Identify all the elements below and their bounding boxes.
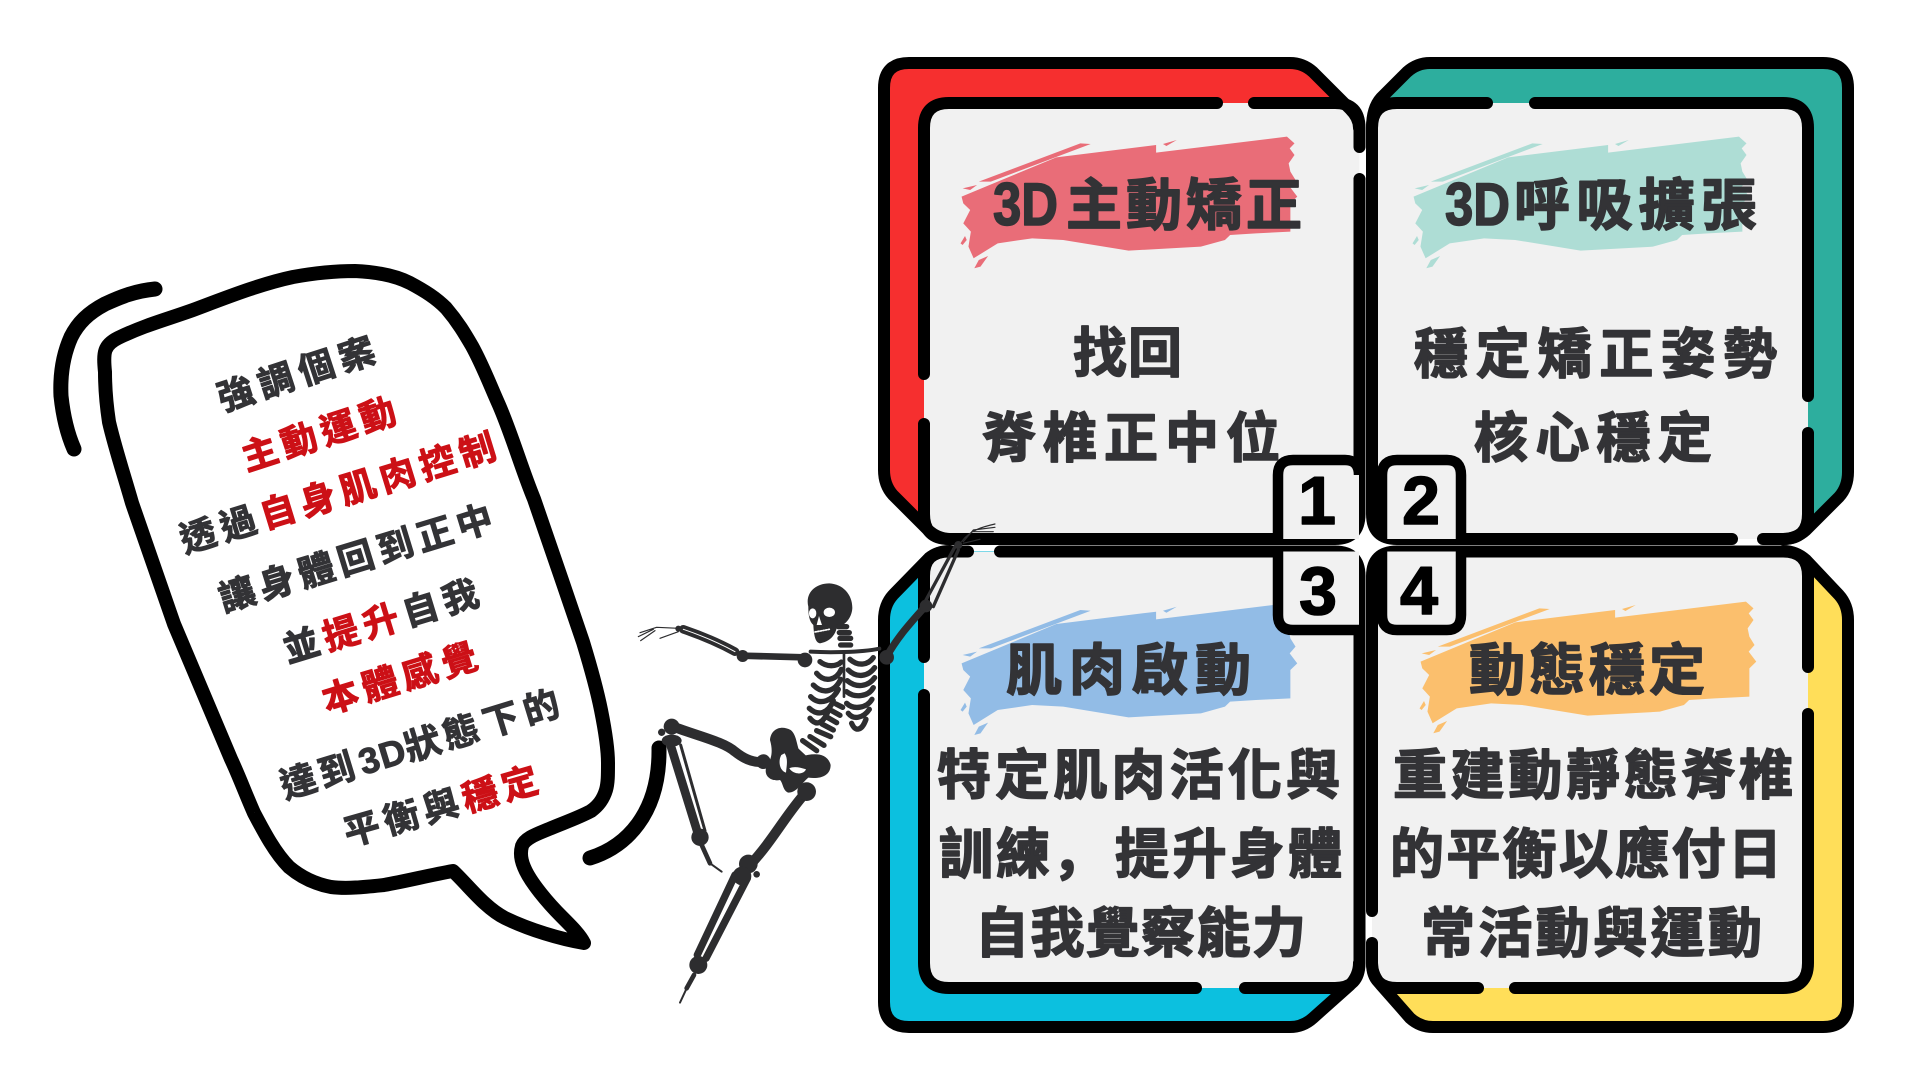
- left leg: [658, 719, 771, 872]
- bubble outline: [104, 271, 608, 943]
- body text: ，: [1052, 810, 1106, 889]
- body text: 穩定矯正姿勢: [1414, 325, 1777, 385]
- badge 1: [1278, 460, 1359, 539]
- heading: 3D: [1445, 171, 1510, 238]
- bubble text: 達到3D狀態下的: [275, 683, 565, 807]
- panel: 3D active correction: [884, 63, 1360, 539]
- brush highlight: [1420, 602, 1756, 733]
- bubble text: 強調個案: [212, 330, 380, 419]
- quote arc left: [61, 289, 155, 449]
- bubble text: 本體感覺: [317, 636, 482, 722]
- badge 4: [1382, 552, 1461, 630]
- body text: [1390, 746, 1793, 964]
- bubble text: 並提升自我: [278, 572, 483, 671]
- neck and spine: [792, 627, 851, 765]
- badge 3: [1278, 552, 1359, 630]
- body text: 自我覺察能力: [975, 904, 1306, 964]
- body text: 特定肌肉活化與: [937, 746, 1340, 806]
- panel: 3D breathing expansion: [1372, 63, 1848, 539]
- heading: 主動矯正: [1066, 174, 1302, 237]
- badge 1: 1: [1298, 463, 1336, 539]
- body text: 找回: [1073, 324, 1182, 384]
- heading: 呼吸擴張: [1514, 174, 1757, 237]
- body text: 的平衡以應付日: [1390, 825, 1782, 885]
- body text: 脊椎正中位: [982, 409, 1280, 469]
- body text: [1414, 325, 1777, 469]
- right leg: [680, 782, 816, 1003]
- brush highlight: [1413, 137, 1749, 268]
- body text: 重建動靜態脊椎: [1393, 746, 1793, 806]
- brush highlight: [961, 603, 1297, 735]
- heading: 肌肉啟動: [1006, 639, 1251, 702]
- left arm: [638, 626, 812, 667]
- brush highlight: [961, 137, 1297, 268]
- body text: [937, 746, 1342, 964]
- body text: 訓練: [939, 825, 1050, 885]
- badge 2: 2: [1402, 463, 1440, 539]
- bubble text: 透過自身肌肉控制: [175, 426, 501, 561]
- body text: 常活動與運動: [1421, 904, 1762, 964]
- badge 3: 3: [1299, 553, 1337, 629]
- body text: [982, 324, 1280, 469]
- panel: muscle activation: [884, 551, 1360, 1027]
- skull: [808, 583, 852, 643]
- body text: 提升身體: [1115, 825, 1342, 885]
- rib cage: [809, 649, 879, 729]
- badge 4: 4: [1400, 553, 1438, 629]
- badge 2: [1382, 460, 1461, 539]
- quote arc right: [590, 748, 659, 858]
- heading: 動態穩定: [1469, 639, 1705, 702]
- heading: 3D: [993, 171, 1058, 238]
- bubble text: 讓身體回到正中: [214, 497, 498, 620]
- pelvis: [766, 728, 831, 793]
- bubble text: 主動運動: [236, 390, 401, 479]
- skeleton illustration: [638, 524, 995, 1003]
- speech bubble: [61, 271, 659, 943]
- bubble text: 平衡與穩定: [339, 759, 543, 854]
- body text: 核心穩定: [1474, 409, 1712, 469]
- bubble text: [175, 330, 565, 854]
- right arm: [879, 524, 995, 665]
- panel: dynamic stability: [1372, 551, 1848, 1027]
